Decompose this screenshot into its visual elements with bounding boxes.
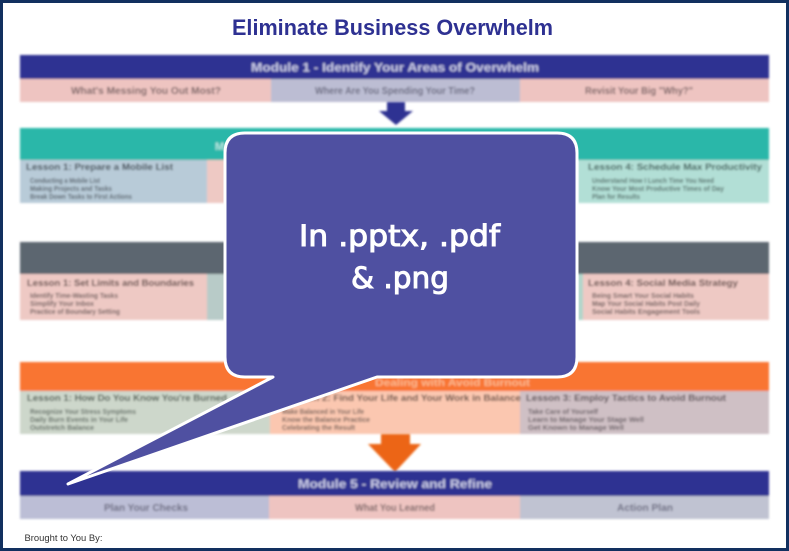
title: Eliminate Business Overwhelm: [232, 15, 553, 40]
panel: module 2: Making Projects and Tasks: [30, 186, 112, 193]
panel: module 1: Module 1 - Identify Your Areas of Overwhelm: [251, 62, 539, 74]
panel: module 3: Lesson 4: Social Media Strategy: [588, 278, 739, 289]
panel: module 4: Dealing with Avoid Burnout: [375, 377, 531, 389]
arrow: module 1 down: [379, 102, 413, 125]
panel: module 3: Simplify Your Inbox: [30, 301, 94, 308]
panel: module 2: M: [215, 141, 224, 153]
panel: module 2: Plan for Results: [592, 194, 640, 201]
callout text: [299, 219, 501, 295]
panel: module 1: What's Messing You Out Most?: [71, 86, 221, 97]
panel: module 2: Know Your Most Productive Times of Day: [592, 186, 724, 193]
panel: module 2: Understand How I Lunch Time You Need: [592, 178, 714, 185]
panel: module 4: Outstretch Balance: [30, 425, 94, 432]
panel: module 2: Lesson 1: Prepare a Mobile List: [26, 162, 174, 173]
panel: module 5: Plan Your Checks: [104, 503, 188, 514]
panel: module 3: Lesson 1: Set Limits and Boundaries: [27, 278, 194, 289]
panel: module 4: Lesson 3: Employ Tactics to Avoid Burnout: [526, 393, 727, 404]
callout: [68, 133, 577, 484]
panel: module 5: What You Learned: [355, 503, 435, 514]
callout text: In .pptx, .pdf: [299, 219, 501, 253]
panel: module 1: [20, 55, 769, 102]
panel: module 3: Social Habits Engagement Tools: [592, 309, 700, 316]
panel: module 4: Lesson 1: How Do You Know You're Burned: [27, 393, 227, 404]
panel: module 3: Identify Time-Wasting Tasks: [30, 293, 118, 300]
panel: module 4: Celebrating the Result: [282, 425, 356, 432]
callout text: & .png: [351, 261, 449, 295]
panel: module 4: Learn to Manage Your Stage Well: [528, 417, 644, 424]
panel: module 5: Module 5 - Review and Refine: [298, 479, 492, 491]
panel: module 4: Recognize Your Stress Symptoms: [30, 409, 136, 416]
panel: module 3: [20, 242, 769, 320]
panel: module 2: Conducting a Mobile List: [30, 178, 101, 185]
panel: module 4: Take Care of Yourself: [528, 409, 599, 416]
panel: module 3: Map Your Social Habits Post Daily: [592, 301, 700, 308]
panel: module 4: Get Known to Manage Well: [528, 425, 624, 432]
panel: module 2: [20, 128, 769, 203]
panel: module 5: Action Plan: [617, 503, 673, 514]
panel: module 1: Revisit Your Big "Why?": [585, 86, 693, 97]
arrow: module 4 down: [368, 434, 421, 472]
panel: module 2: Lesson 4: Schedule Max Productivity: [588, 162, 763, 173]
panel: module 4: Make Balanced in Your Life: [282, 409, 364, 416]
panel: module 3: Being Smart Your Social Habits: [592, 293, 694, 300]
panel: module 1: Where Are You Spending Your Time?: [315, 86, 475, 97]
panel: module 4: Know the Balance Practice: [282, 417, 370, 424]
panel: module 3: Practice of Boundary Setting: [30, 309, 120, 316]
panel: module 4: Lesson 2: Find Your Life and Your Work in Balance: [285, 393, 521, 404]
panel: module 5: [20, 471, 769, 519]
panel: module 4: Daily Burn Events in Your Life: [30, 417, 128, 424]
panel: module 2: Break Down Tasks to First Actions: [30, 194, 132, 201]
panel: module 4: [20, 362, 769, 434]
footer credit: Brought to You By:: [24, 533, 102, 543]
